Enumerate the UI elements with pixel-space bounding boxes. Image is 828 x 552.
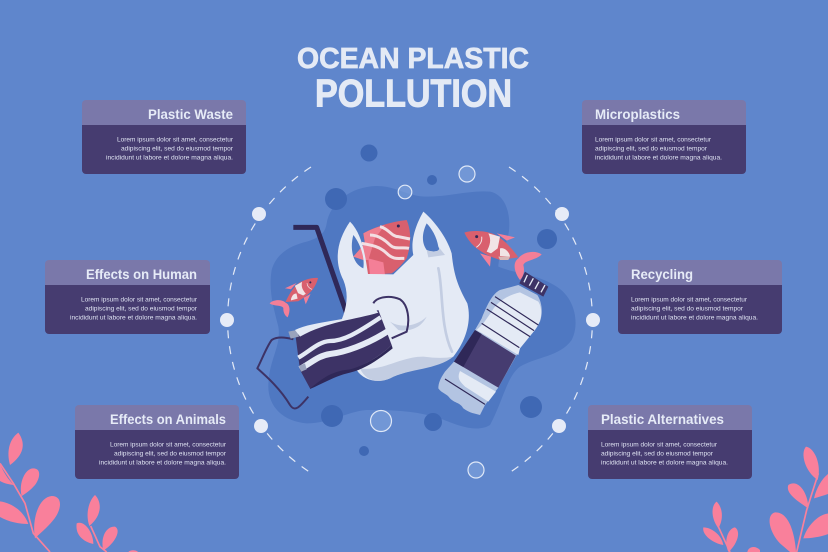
light bubbles [370,166,484,478]
panel: effects on animals: adipiscing elit, sed do eiusmod tempor [114,450,227,458]
leaves: bottom right [703,447,828,552]
panel: recycling: Recycling [631,267,693,282]
panel: microplastics: adipiscing elit, sed do eiusmod tempor [595,146,708,152]
panel: plastic alternatives: Lorem ipsum dolor sit amet, consectetur [601,442,718,448]
title [297,43,529,116]
panel: plastic alternatives: adipiscing elit, sed do eiusmod tempor [601,450,714,458]
panel: recycling: adipiscing elit, sed do eiusmod tempor [631,306,744,312]
panel: recycling: Lorem ipsum dolor sit amet, consectetur [631,296,748,304]
panel: plastic alternatives [588,405,752,479]
panel: effects on animals: incididunt ut labore et dolore magna aliqua. [99,460,226,466]
dashed ring with dots [220,167,600,473]
title: OCEAN PLASTIC [297,43,529,75]
face mask [257,297,408,408]
straw [293,227,347,313]
background blob [268,186,576,428]
panel: plastic waste: adipiscing elit, sed do eiusmod tempor [121,146,234,152]
panel: recycling [618,260,782,334]
panel: plastic waste: Lorem ipsum dolor sit amet, consectetur [117,136,234,144]
dark bubbles [321,144,557,456]
panel: effects on human: adipiscing elit, sed do eiusmod tempor [85,306,198,312]
panel: plastic waste [82,100,246,174]
leaves: bottom left [0,433,138,552]
panel: plastic alternatives: Plastic Alternatives [601,412,724,427]
panel: microplastics: incididunt ut labore et dolore magna aliqua. [595,154,722,162]
panel: microplastics [582,100,746,174]
fish in bag [353,220,420,275]
panel: recycling: incididunt ut labore et dolore magna aliqua. [631,314,758,322]
panel: plastic alternatives: incididunt ut labore et dolore magna aliqua. [601,460,728,466]
fish left [266,277,325,320]
plastic bag [333,212,469,381]
panel: microplastics: Microplastics [595,107,680,122]
panel: plastic waste: Plastic Waste [148,107,233,122]
panel: effects on human: Effects on Human [86,267,197,282]
panel: effects on human [45,260,210,334]
panel: microplastics: Lorem ipsum dolor sit amet, consectetur [595,136,712,144]
plastic bottle [438,272,548,415]
panel: effects on animals: Effects on Animals [110,412,226,427]
fish right [464,231,542,280]
panel: effects on animals: Lorem ipsum dolor sit amet, consectetur [110,442,227,448]
panel: effects on human: Lorem ipsum dolor sit amet, consectetur [81,296,198,304]
panel: plastic waste: incididunt ut labore et dolore magna aliqua. [106,154,233,162]
title: POLLUTION [315,72,512,116]
panel: effects on animals [75,405,239,479]
panel: effects on human: incididunt ut labore et dolore magna aliqua. [70,314,197,322]
